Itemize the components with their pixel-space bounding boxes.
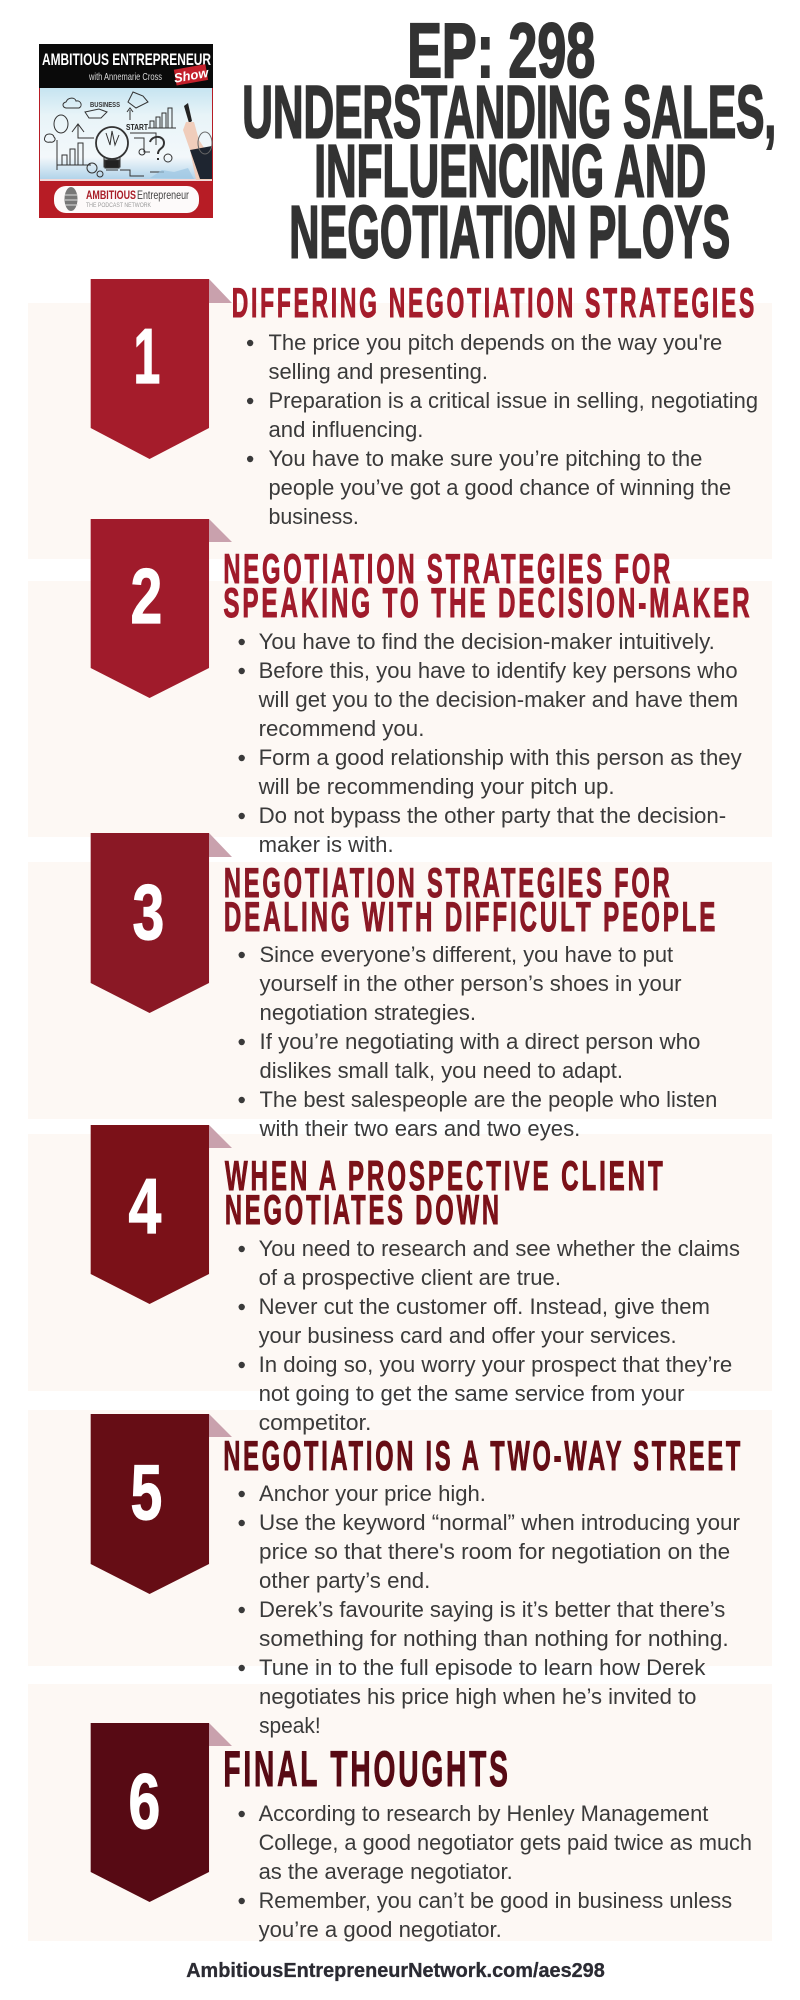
bullets 2: Before this, you have to identify key persons who (259, 658, 738, 683)
bullets 5: negotiates his price high when he’s invited to (259, 1684, 696, 1709)
bullets 4: Never cut the customer off. Instead, give them (259, 1294, 710, 1319)
bullets 4: not going to get the same service from your (259, 1381, 685, 1406)
bullets 1: The price you pitch depends on the way you're (269, 330, 722, 355)
bullets 1 (247, 330, 758, 529)
section 4: when a prospective client negotiates down (91, 1125, 740, 1435)
heading 3 (224, 859, 718, 940)
heading 4: NEGOTIATES DOWN (225, 1186, 502, 1233)
bullets 2: Form a good relationship with this person as they (259, 745, 742, 770)
bullets 2: recommend you. (259, 716, 424, 741)
bullets 5: other party’s end. (259, 1568, 430, 1593)
title (242, 8, 776, 274)
bullets 5: speak! (259, 1713, 321, 1738)
bullets 6 (239, 1801, 752, 1942)
heading 4 (225, 1152, 666, 1233)
podcast cover logo: AMBITIOUS ENTREPRENEUR (42, 51, 211, 69)
bullets 1: selling and presenting. (269, 359, 488, 384)
ribbon 6 (91, 1723, 232, 1902)
footer url: AmbitiousEntrepreneurNetwork.com/aes298 (186, 1960, 605, 1982)
bullets 4: You need to research and see whether the claims (259, 1236, 740, 1261)
ribbon 2: 2 (130, 554, 162, 640)
bullets 3: negotiation strategies. (260, 1000, 476, 1025)
bullets 2: will be recommending your pitch up. (258, 774, 615, 799)
ribbon 3: 3 (132, 870, 164, 956)
bullets 3: Since everyone’s different, you have to put (260, 942, 673, 967)
bullets 3 (239, 942, 717, 1141)
bullets 6: College, a good negotiator gets paid twice as much (259, 1830, 752, 1855)
ribbon 4: 4 (129, 1164, 161, 1250)
bullets 1: You have to make sure you’re pitching to the (269, 446, 702, 471)
bullets 6: as the average negotiator. (259, 1859, 513, 1884)
podcast cover logo: Show (173, 65, 210, 86)
ribbon 6: 6 (129, 1759, 160, 1845)
bullets 2: maker is with. (259, 832, 394, 857)
podcast cover logo: START (126, 123, 148, 132)
bullets 5: price so that there's room for negotiation on the (259, 1539, 730, 1564)
bullets 6: According to research by Henley Management (259, 1801, 708, 1826)
panel backgrounds (28, 303, 772, 1941)
ribbon 3 (91, 833, 232, 1013)
bullets 4: of a prospective client are true. (259, 1265, 561, 1290)
bullets 5: Tune in to the full episode to learn how Derek (259, 1655, 705, 1680)
bullets 5: Anchor your price high. (259, 1481, 486, 1506)
bullets 5: Derek’s favourite saying is it’s better that there’s (259, 1597, 725, 1622)
bullets 3: with their two ears and two eyes. (259, 1116, 580, 1141)
bullets 5 (239, 1481, 740, 1738)
ribbon 5 (91, 1414, 232, 1594)
podcast cover logo: Entrepreneur (137, 188, 189, 202)
section 1: differing negotiation strategies (91, 279, 758, 529)
bullets 1: business. (269, 504, 359, 529)
title: EP: 298 (407, 8, 595, 94)
podcast cover logo: BUSINESS (90, 102, 120, 109)
bullets 2: will get you to the decision-maker and have them (258, 687, 738, 712)
section 5: negotiation is a two-way street (91, 1414, 743, 1738)
bullets 4: In doing so, you worry your prospect that they’re (259, 1352, 732, 1377)
ribbon 4 (91, 1125, 232, 1304)
ribbon 1: 1 (133, 314, 160, 400)
ribbon 1 (91, 279, 232, 459)
bullets 1: people you’ve got a good chance of winning the (269, 475, 731, 500)
bullets 4: your business card and offer your services. (259, 1323, 677, 1348)
section 3: dealing with difficult people (91, 833, 718, 1141)
ribbon 5: 5 (130, 1450, 162, 1536)
section 6: final thoughts (91, 1723, 752, 1942)
bullets 5: something for nothing than nothing for nothing. (259, 1626, 729, 1651)
section 2: speaking to the decision-maker (91, 519, 753, 857)
podcast cover logo (39, 44, 213, 218)
bullets 2: You have to find the decision-maker intuitively. (259, 629, 715, 654)
podcast cover logo: AMBITIOUS (86, 188, 136, 202)
bullets 5: Use the keyword “normal” when introducing your (259, 1510, 740, 1535)
bullets 1: and influencing. (269, 417, 423, 442)
bullets 3: The best salespeople are the people who listen (260, 1087, 717, 1112)
bullets 3: If you’re negotiating with a direct person who (260, 1029, 700, 1054)
bullets 6: you’re a good negotiator. (259, 1917, 502, 1942)
podcast cover logo: THE PODCAST NETWORK (86, 203, 151, 209)
bullets 1: Preparation is a critical issue in selling, negotiating (269, 388, 758, 413)
bullets 2: Do not bypass the other party that the decision- (259, 803, 726, 828)
ribbon 2 (91, 519, 232, 698)
bullets 4: competitor. (259, 1410, 371, 1435)
bullets 3: dislikes small talk, you need to adapt. (260, 1058, 623, 1083)
bullets 4 (239, 1236, 740, 1435)
bullets 2 (239, 629, 742, 857)
heading 6: FINAL THOUGHTS (223, 1741, 511, 1797)
podcast cover logo: with Annemarie Cross (88, 71, 162, 83)
bullets 3: yourself in the other person’s shoes in your (260, 971, 682, 996)
heading 2 (223, 545, 753, 626)
bullets 6: Remember, you can’t be good in business unless (259, 1888, 732, 1913)
